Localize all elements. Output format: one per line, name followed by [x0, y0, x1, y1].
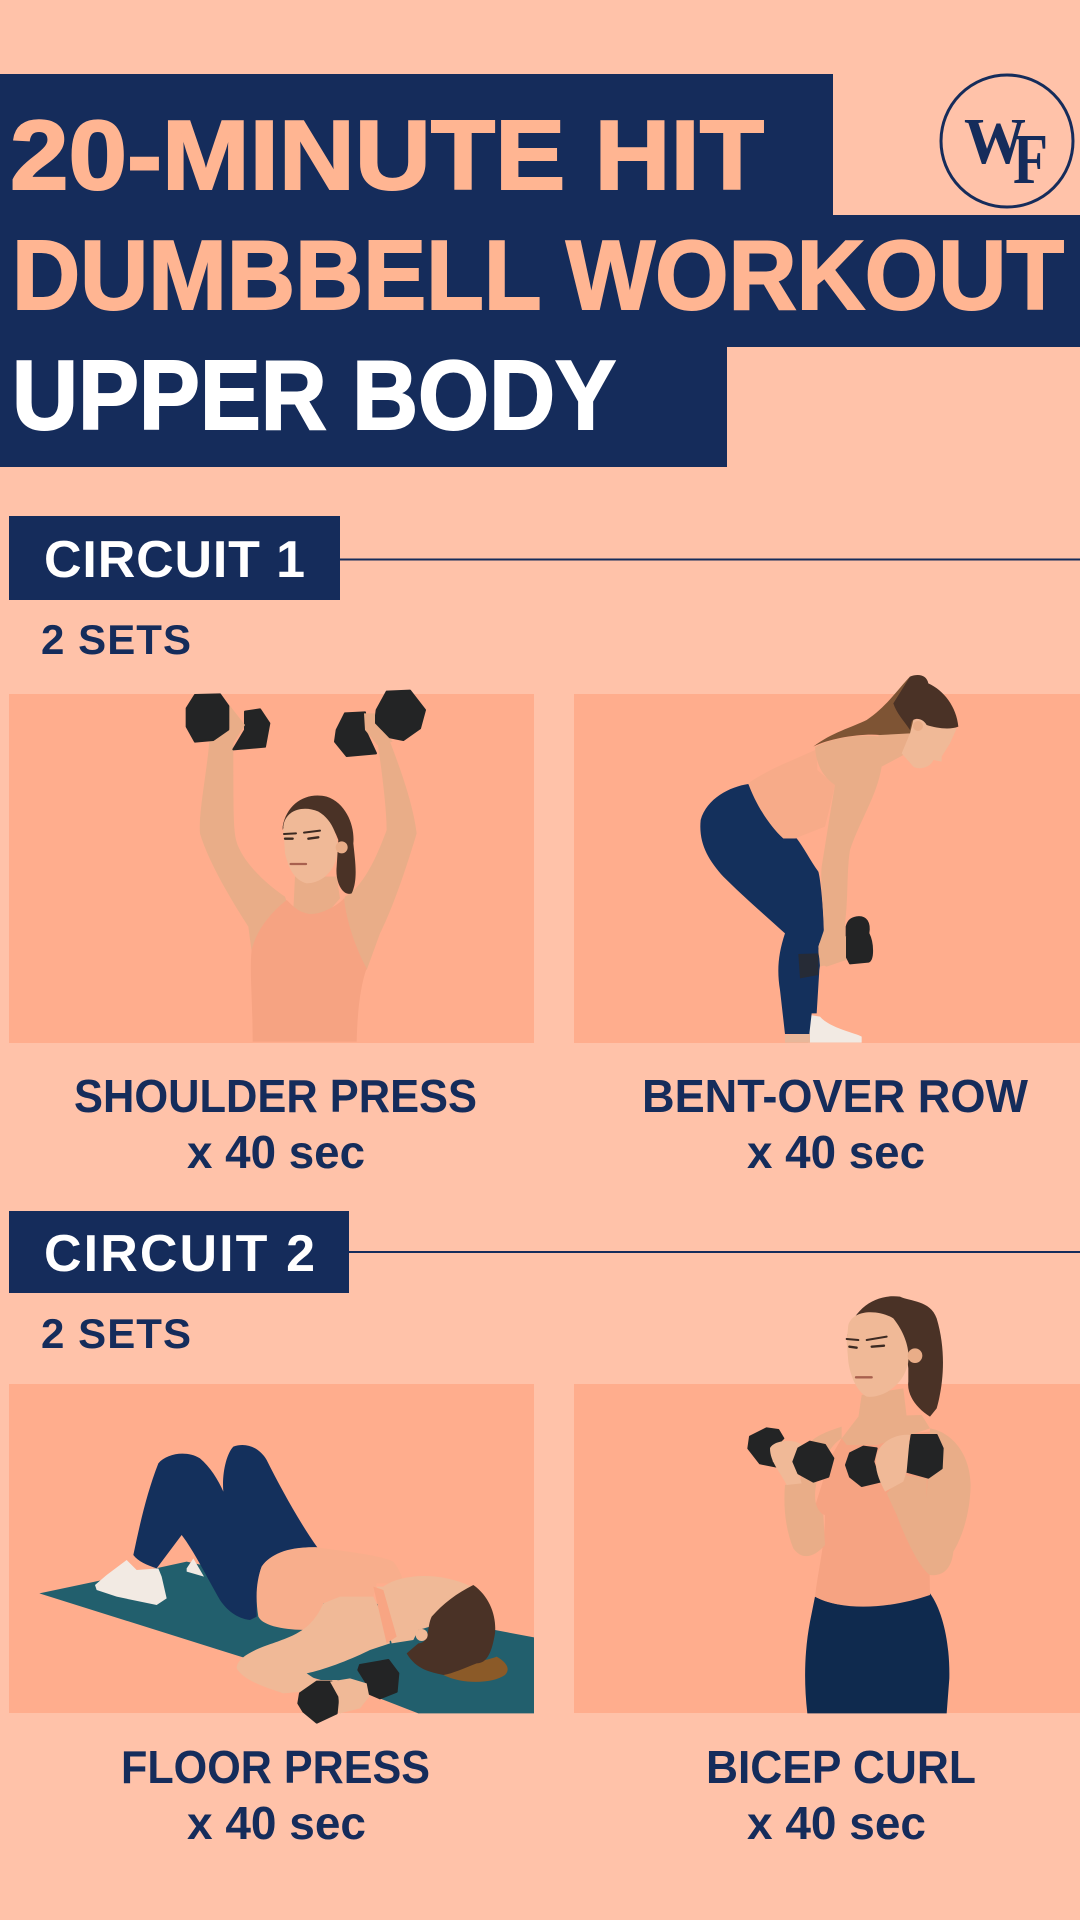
circuit 2 heading [9, 1211, 1080, 1293]
logo: WF monogram: F [1013, 119, 1048, 199]
exercise label: floor press: x 40 sec [187, 1797, 366, 1849]
panel: bent-over row [574, 675, 1080, 1043]
exercise label: shoulder press: SHOULDER PRESS [74, 1070, 477, 1122]
panel: bicep curl [574, 1296, 1080, 1713]
exercise label: floor press: FLOOR PRESS [121, 1741, 430, 1793]
exercise label: bicep curl [706, 1741, 976, 1849]
circuit 1 heading [9, 516, 1080, 600]
exercise label: shoulder press: x 40 sec [187, 1126, 365, 1178]
logo: WF monogram: W [964, 105, 1026, 178]
title line 1: 20-MINUTE HIT [10, 100, 764, 210]
circuit 2 sets: 2 SETS [41, 1310, 191, 1357]
title line 2: DUMBBELL WORKOUT [12, 220, 1064, 330]
exercise label: bent-over row: BENT-OVER ROW [642, 1070, 1029, 1122]
title line 3: UPPER BODY [12, 340, 616, 450]
exercise label: bicep curl: BICEP CURL [706, 1741, 976, 1793]
exercise label: bent-over row [642, 1070, 1029, 1178]
exercise label: bent-over row: x 40 sec [747, 1126, 925, 1178]
logo: WF monogram [941, 75, 1073, 207]
panel: shoulder press [9, 691, 534, 1043]
circuit 1 heading: CIRCUIT 1 [44, 531, 305, 589]
figure: woman pressing dumbbells overhead [187, 691, 425, 1042]
figure: woman doing floor press on a mat [39, 1445, 534, 1723]
figure: woman doing bicep curls [748, 1296, 971, 1713]
exercise label: floor press [121, 1741, 430, 1849]
panel: floor press [9, 1384, 534, 1723]
circuit 2 heading: CIRCUIT 2 [44, 1225, 315, 1283]
figure: woman in bent-over row [700, 675, 958, 1043]
circuit 1 sets: 2 SETS [41, 616, 191, 663]
header banner [0, 74, 1080, 467]
exercise label: shoulder press [74, 1070, 477, 1178]
exercise label: bicep curl: x 40 sec [747, 1797, 926, 1849]
